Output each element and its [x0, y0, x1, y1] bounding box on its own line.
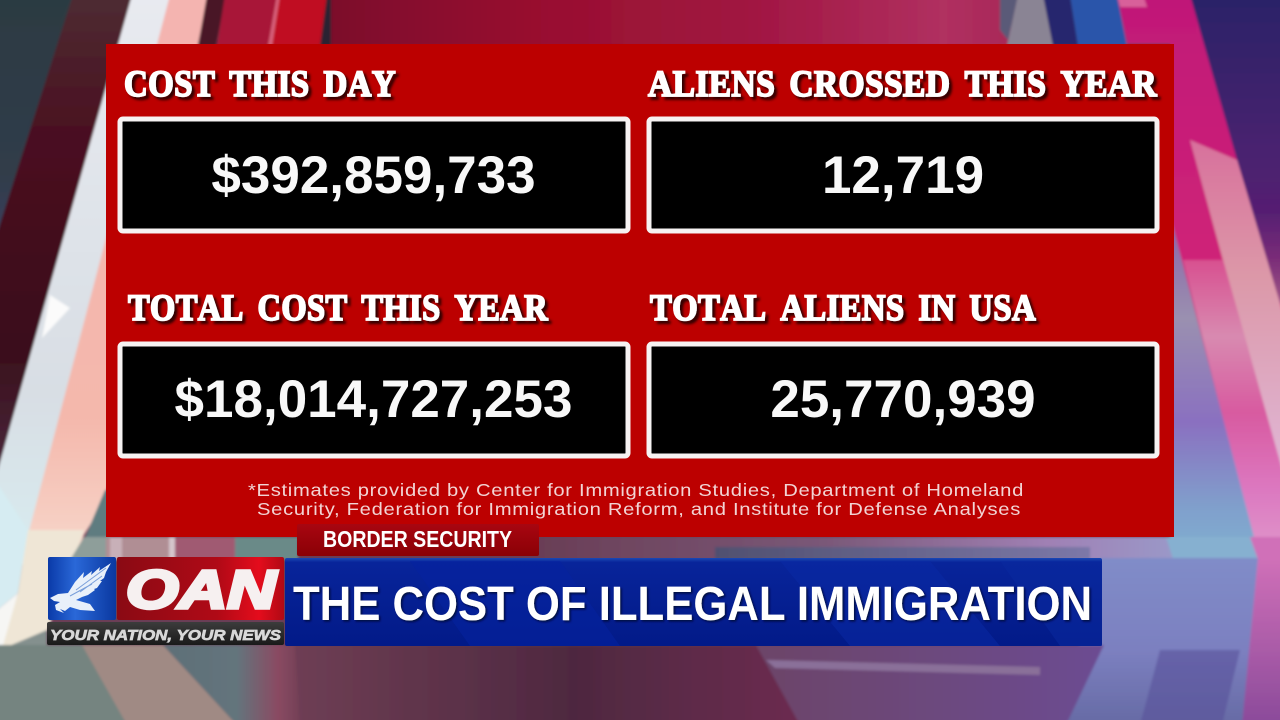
panel label: total cost this year: TOTAL COST THIS YEAR	[128, 288, 549, 329]
footnote: sources: *Estimates provided by Center for Immigration Studies, Department of Homeland	[248, 480, 1024, 500]
tagline strip	[47, 622, 284, 645]
icon: eagle on blue square	[48, 557, 116, 620]
counter: total cost this year: $18,014,727,253	[175, 370, 572, 429]
headline bar: THE COST OF ILLEGAL IMMIGRATION	[293, 578, 1092, 631]
footnote: sources: Security, Federation for Immigration Reform, and Institute for Defense Analyses	[257, 499, 1021, 519]
headline bar	[285, 558, 1102, 646]
panel label: cost this day: COST THIS DAY	[124, 64, 396, 105]
footnote: sources	[248, 480, 1024, 519]
tagline strip: YOUR NATION, YOUR NEWS	[50, 627, 281, 644]
counter: cost this day	[120, 119, 628, 231]
panel: red statistics board	[106, 44, 1174, 537]
panel label: total aliens in usa: TOTAL ALIENS IN USA	[650, 288, 1036, 329]
logo mark: OAN wordmark: OAN	[126, 560, 277, 620]
counter: aliens crossed this year: 12,719	[822, 146, 984, 205]
logo: OAN	[47, 557, 284, 645]
logo mark: OAN wordmark	[117, 557, 284, 620]
counter: cost this day: $392,859,733	[211, 146, 536, 205]
counter: total aliens in usa: 25,770,939	[770, 370, 1036, 429]
counter: total cost this year	[120, 344, 628, 456]
counter: total aliens in usa	[649, 344, 1157, 456]
tab: border security: BORDER SECURITY	[323, 526, 512, 552]
panel label: aliens crossed this year: ALIENS CROSSED THIS YEAR	[648, 64, 1158, 105]
counter: aliens crossed this year	[649, 119, 1157, 231]
